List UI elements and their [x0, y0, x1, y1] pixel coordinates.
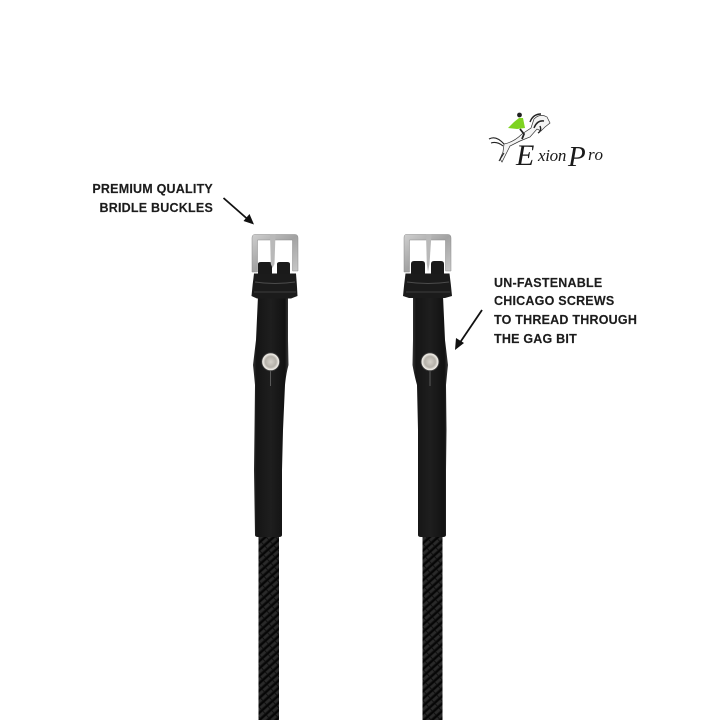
- logo wordmark: [515, 139, 604, 173]
- arrow: to chicago screw: [455, 310, 482, 350]
- left strap with buckle and rope: [252, 234, 298, 720]
- right strap with buckle and rope: [403, 234, 452, 720]
- logo wordmark: xion: [537, 146, 566, 165]
- label: chicago screws: CHICAGO SCREWS: [494, 294, 614, 308]
- right rope: [422, 536, 442, 720]
- logo wordmark: ro: [588, 145, 604, 164]
- right leather strap: [412, 296, 448, 537]
- right buckle: [404, 234, 451, 275]
- logo: ExionPro: [489, 113, 604, 173]
- right keeper: [403, 274, 452, 298]
- label: chicago screws: UN-FASTENABLE: [494, 276, 602, 290]
- label: chicago screws: TO THREAD THROUGH: [494, 313, 637, 327]
- label: chicago screws: THE GAG BIT: [494, 332, 577, 346]
- right rivet: [421, 353, 439, 371]
- arrow: to bridle buckle: [224, 198, 254, 224]
- logo horse: [489, 114, 550, 162]
- label: premium quality bridle buckles: [92, 182, 213, 215]
- logo wordmark: P: [567, 141, 586, 173]
- label: premium quality bridle buckles: BRIDLE BUCKLES: [100, 201, 213, 215]
- left leather strap: [253, 296, 288, 537]
- logo rider: [508, 113, 525, 139]
- logo wordmark: E: [515, 139, 534, 172]
- left keeper: [252, 274, 298, 298]
- label: premium quality bridle buckles: PREMIUM QUALITY: [92, 182, 213, 196]
- left buckle: [252, 234, 298, 275]
- left rope: [258, 536, 279, 720]
- left rivet: [262, 353, 280, 371]
- label: chicago screws: [494, 276, 637, 346]
